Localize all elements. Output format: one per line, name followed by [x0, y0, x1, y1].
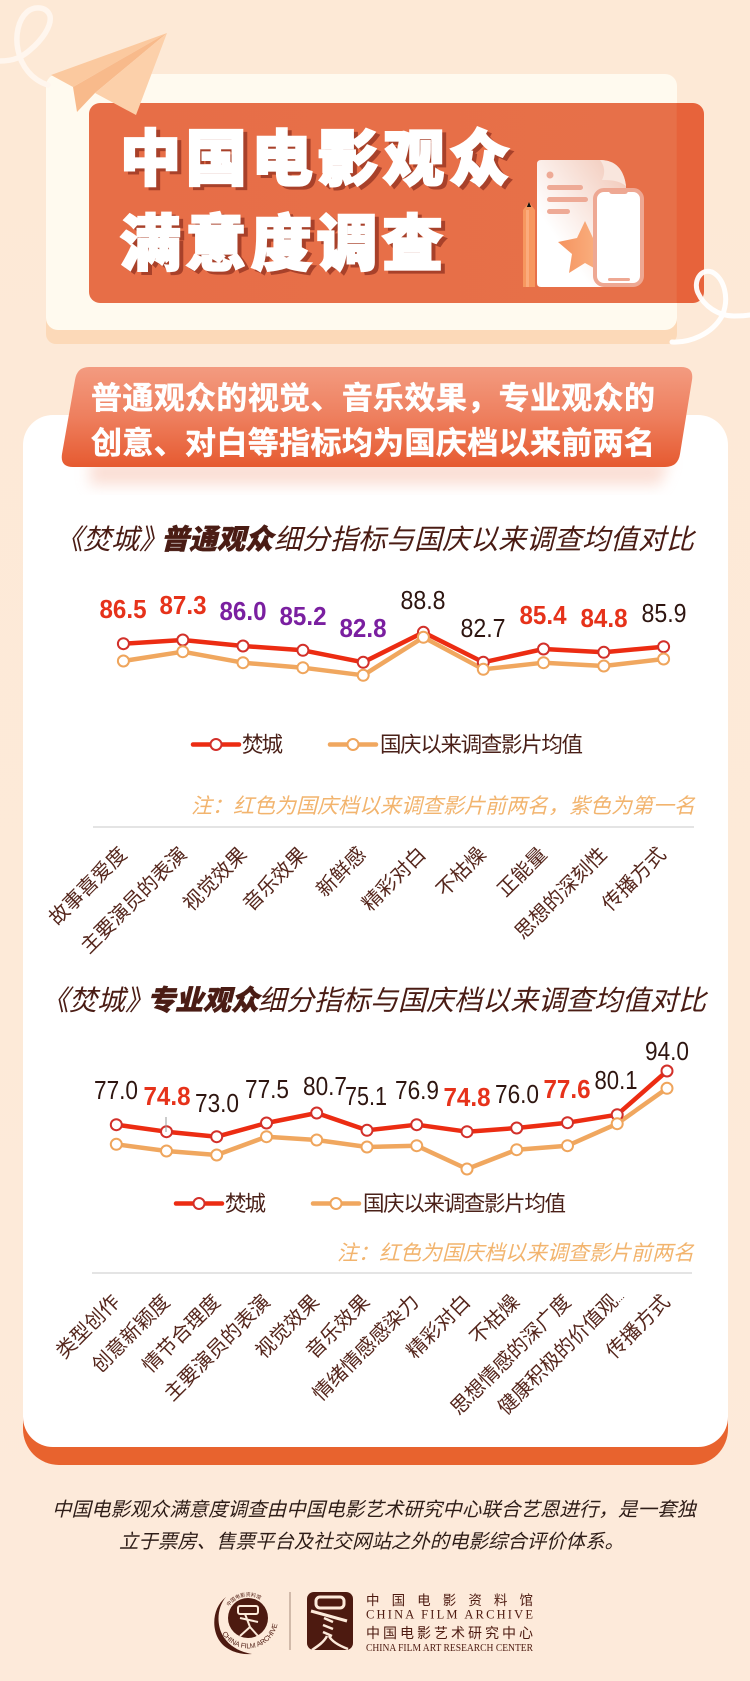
x axis labels 2: 情绪情感感染力: [305, 1287, 424, 1406]
series markers: 均值: [111, 1083, 673, 1174]
value labels: 77.5: [245, 1074, 289, 1104]
title card: [46, 74, 704, 344]
footer text: 立于票房、售票平台及社交网站之外的电影综合评价体系。: [119, 1525, 624, 1554]
value labels: 77.6: [544, 1074, 590, 1104]
value labels: 74.8: [444, 1082, 490, 1112]
note 2: 注：红色为国庆档以来调查影片前两名: [337, 1237, 695, 1267]
value labels: 77.0: [94, 1075, 138, 1105]
line chart 2: [94, 1036, 689, 1174]
value labels: 76.0: [495, 1079, 539, 1109]
footer text: [52, 1493, 697, 1554]
series markers: 均值: [118, 632, 669, 681]
chart 1 heading: [55, 518, 697, 558]
value labels: 94.0: [645, 1036, 689, 1066]
decorative loop: top left: [0, 8, 50, 85]
panel base orange: [23, 1380, 728, 1465]
value labels: 86.5: [100, 594, 146, 624]
icon: document phone pencil: [523, 160, 642, 287]
value labels: 76.9: [395, 1075, 439, 1105]
x axis labels 1: 正能量: [489, 839, 552, 902]
x axis labels 2: 传播方式: [598, 1287, 675, 1364]
value labels: 85.9: [642, 598, 686, 628]
title: 满意度调查: [120, 194, 443, 283]
x axis labels 2: 创意新颖度: [84, 1287, 175, 1378]
legend 2: [176, 1187, 566, 1218]
value labels: 85.4: [520, 600, 567, 630]
x axis labels 2: 情节合理度: [135, 1287, 226, 1378]
chart 2 heading: 细分指标与国庆档以来调查均值对比: [258, 979, 709, 1019]
chart 2 heading: 专业观众: [147, 979, 262, 1019]
value labels: 84.8: [580, 603, 628, 633]
title: 满意度调查: [124, 197, 447, 286]
logo divider: [289, 1592, 291, 1650]
x axis labels 1: 视觉效果: [175, 839, 252, 916]
value labels: 85.2: [280, 601, 326, 631]
legend 2: 焚城: [225, 1187, 266, 1218]
value labels: 86.0: [220, 596, 266, 626]
note 1: 注：红色为国庆档以来调查影片前两名，紫色为第一名: [191, 790, 696, 820]
value labels: 88.8: [400, 585, 446, 615]
series: 国庆档以来调查影片均值: [116, 1088, 667, 1169]
chart 2 heading: [41, 979, 709, 1019]
legend 1: 焚城: [242, 728, 283, 759]
x axis labels 1: 思想的深刻性: [507, 839, 612, 945]
title: 中国电影观众: [124, 112, 514, 201]
logo text: [366, 1589, 534, 1654]
value labels: 74.8: [144, 1081, 190, 1111]
banner text: [91, 373, 655, 463]
chart 1 heading: 普通观众: [161, 518, 276, 558]
value labels: 73.0: [195, 1088, 239, 1118]
banner text: 普通观众的视觉、音乐效果，专业观众的: [91, 373, 655, 418]
legend 2: 国庆以来调查影片均值: [363, 1187, 566, 1218]
x axis labels 2: 思想情感的深广度: [443, 1287, 576, 1420]
x axis labels 1: 音乐效果: [235, 839, 312, 916]
x axis labels 1: 不枯燥: [428, 839, 491, 902]
value labels: 82.8: [340, 613, 386, 643]
orange title panel: [89, 103, 704, 303]
x axis labels 2: 精彩对白: [399, 1287, 476, 1364]
logo: film archive mark: [307, 1592, 353, 1650]
banner shadow: [90, 460, 670, 485]
banner text: 创意、对白等指标均为国庆档以来前两名: [91, 418, 655, 463]
series: 焚城: [118, 627, 669, 668]
x axis labels 1: 精彩对白: [354, 839, 431, 916]
value labels: [100, 585, 686, 643]
chart 1 heading: 细分指标与国庆以来调查均值对比: [274, 518, 697, 558]
x axis labels 2: 健康积极的价值观...: [490, 1281, 629, 1420]
value labels: [94, 1036, 689, 1118]
logo: seal: [214, 1592, 278, 1654]
x axis labels 1: 故事喜爱度: [41, 839, 132, 930]
decorative loop: right: [672, 271, 750, 342]
x axis labels 2: 不枯燥: [462, 1287, 525, 1350]
banner: [62, 367, 692, 467]
x axis labels 2: [48, 1281, 675, 1420]
x axis labels 1: 主要演员的表演: [73, 839, 192, 959]
line chart 1: [100, 585, 686, 681]
logo text: CHINA FILM ARCHIVE: [366, 1608, 533, 1622]
title: [120, 109, 514, 286]
x axis labels 1: [41, 839, 671, 959]
logo: seal: 中国电影资料馆: [226, 1592, 262, 1606]
panel white body: [23, 415, 728, 1447]
series: 国庆以来调查影片均值: [123, 637, 664, 675]
icon: paper plane: [51, 33, 167, 115]
x axis labels 2: 视觉效果: [248, 1287, 325, 1364]
cream card shadow: [46, 90, 677, 344]
value labels: 87.3: [160, 590, 206, 620]
series: 焚城: [111, 1066, 673, 1142]
value labels: 80.7: [303, 1071, 347, 1101]
footer text: 中国电影观众满意度调查由中国电影艺术研究中心联合艺恩进行，是一套独: [52, 1493, 697, 1522]
panel: white content: [23, 415, 728, 1465]
value labels: 82.7: [460, 613, 506, 643]
title: 中国电影观众: [120, 109, 510, 198]
x axis labels 2: 主要演员的表演: [156, 1287, 276, 1406]
x axis labels 1: 传播方式: [594, 839, 671, 916]
logo text: CHINA FILM ART RESEARCH CENTER: [366, 1642, 534, 1654]
chart 2 heading: 《焚城》: [41, 979, 153, 1019]
value labels: 75.1: [345, 1081, 387, 1111]
value labels: 80.1: [594, 1065, 638, 1095]
logo: seal: CHINA FILM ARCHIVE: [223, 1623, 278, 1648]
logo text: 中国电影艺术研究中心: [366, 1623, 533, 1643]
x axis labels 1: 新鲜感: [308, 839, 371, 902]
cream card: [46, 74, 677, 330]
chart 1 heading: 《焚城》: [55, 518, 167, 558]
legend 1: 国庆以来调查影片均值: [380, 728, 583, 759]
logo text: 中国电影资料馆: [366, 1589, 533, 1609]
x axis labels 2: 类型创作: [48, 1287, 125, 1364]
legend 1: [193, 728, 583, 759]
x axis labels 2: 音乐效果: [298, 1287, 375, 1364]
